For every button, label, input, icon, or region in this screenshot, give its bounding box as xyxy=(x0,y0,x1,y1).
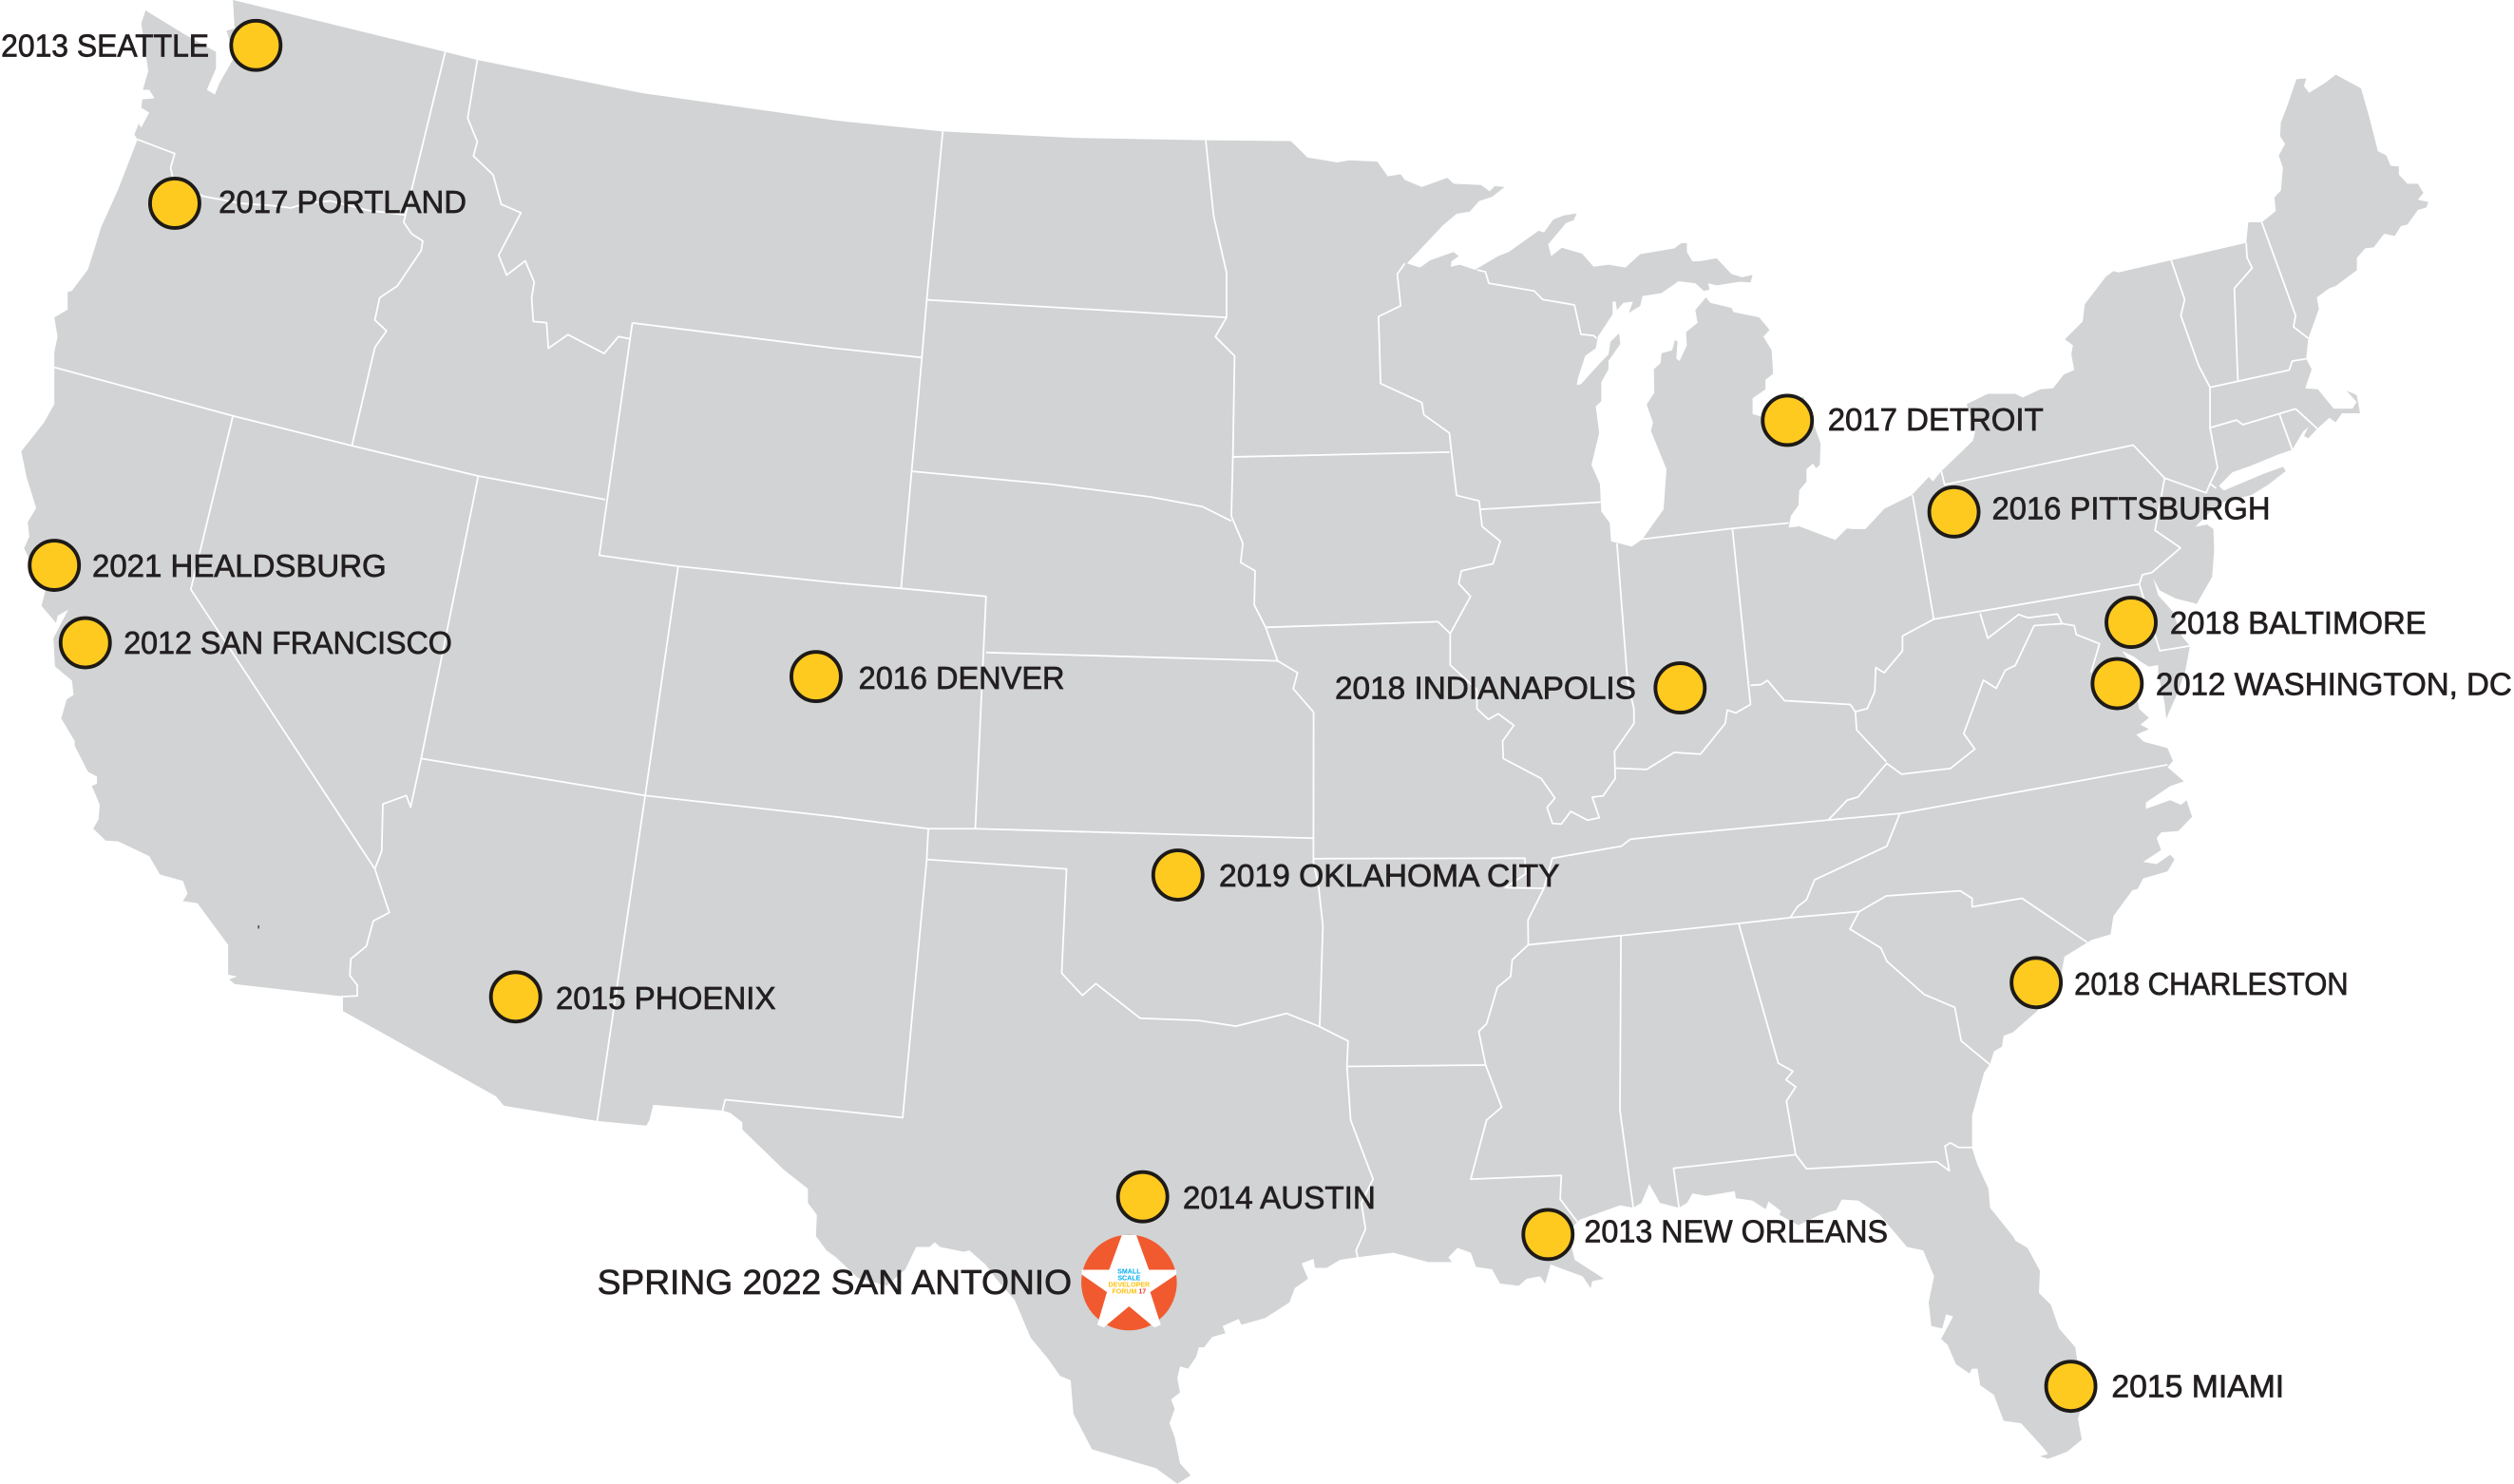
tiny map speck xyxy=(258,925,259,928)
marker: 2013 New Orleans xyxy=(1523,1209,1888,1259)
marker: 2016 Pittsburgh: 2016 PITTSBURGH xyxy=(1992,490,2270,525)
icon: forum star badge: FORUM 17 xyxy=(1112,1288,1146,1296)
marker: 2016 Denver: 2016 DENVER xyxy=(859,660,1065,695)
marker: 2012 San Francisco xyxy=(61,618,452,668)
marker: 2019 Oklahoma City xyxy=(1153,850,1560,900)
marker: 2017 Portland: 2017 PORTLAND xyxy=(219,184,467,219)
marker: 2018 Charleston: 2018 CHARLESTON xyxy=(2074,966,2349,1001)
marker: 2015 Miami xyxy=(2047,1361,2284,1411)
marker: 2012 Washington, DC: 2012 WASHINGTON, DC xyxy=(2156,667,2512,702)
icon: forum star badge: DEVELOPER xyxy=(1109,1282,1150,1289)
marker: 2017 Detroit xyxy=(1762,395,2044,445)
marker: 2016 Denver xyxy=(791,652,1065,701)
marker: Spring 2022 San Antonio xyxy=(598,1235,1177,1330)
marker: 2019 Oklahoma City: 2019 OKLAHOMA CITY xyxy=(1219,858,1560,893)
marker: 2014 Austin: 2014 AUSTIN xyxy=(1183,1180,1376,1215)
marker: 2017 Portland xyxy=(150,179,467,228)
marker: 2018 Baltimore: 2018 BALTIMORE xyxy=(2170,605,2427,640)
icon: forum star badge: SCALE xyxy=(1117,1274,1141,1282)
marker: 2015 Phoenix: 2015 PHOENIX xyxy=(556,980,776,1016)
icon: forum star badge xyxy=(1081,1235,1177,1330)
marker: 2021 Healdsburg xyxy=(29,541,387,590)
marker: 2014 Austin xyxy=(1118,1172,1376,1222)
marker: 2018 Charleston xyxy=(2011,958,2349,1007)
marker: 2015 Miami: 2015 MIAMI xyxy=(2111,1369,2284,1404)
icon: forum star badge: SMALL xyxy=(1117,1267,1141,1275)
marker: 2012 San Francisco: 2012 SAN FRANCISCO xyxy=(124,625,452,660)
state borders xyxy=(54,52,2318,1258)
marker: 2013 New Orleans: 2013 NEW ORLEANS xyxy=(1584,1213,1888,1248)
marker: 2018 Baltimore xyxy=(2106,598,2427,647)
marker: 2012 Washington, DC xyxy=(2092,659,2512,709)
marker: 2018 Indianapolis xyxy=(1335,663,1705,713)
marker: 2013 Seattle xyxy=(1,21,280,70)
label: Spring 2022 San Antonio: SPRING 2022 SAN ANTONIO xyxy=(598,1263,1072,1302)
marker: 2013 Seattle: 2013 SEATTLE xyxy=(1,29,209,64)
marker: 2018 Indianapolis: 2018 INDIANAPOLIS xyxy=(1335,671,1636,706)
marker: 2015 Phoenix xyxy=(491,972,776,1021)
marker: 2021 Healdsburg: 2021 HEALDSBURG xyxy=(92,548,387,583)
marker: 2016 Pittsburgh xyxy=(1930,487,2270,537)
marker: 2017 Detroit: 2017 DETROIT xyxy=(1828,402,2044,437)
